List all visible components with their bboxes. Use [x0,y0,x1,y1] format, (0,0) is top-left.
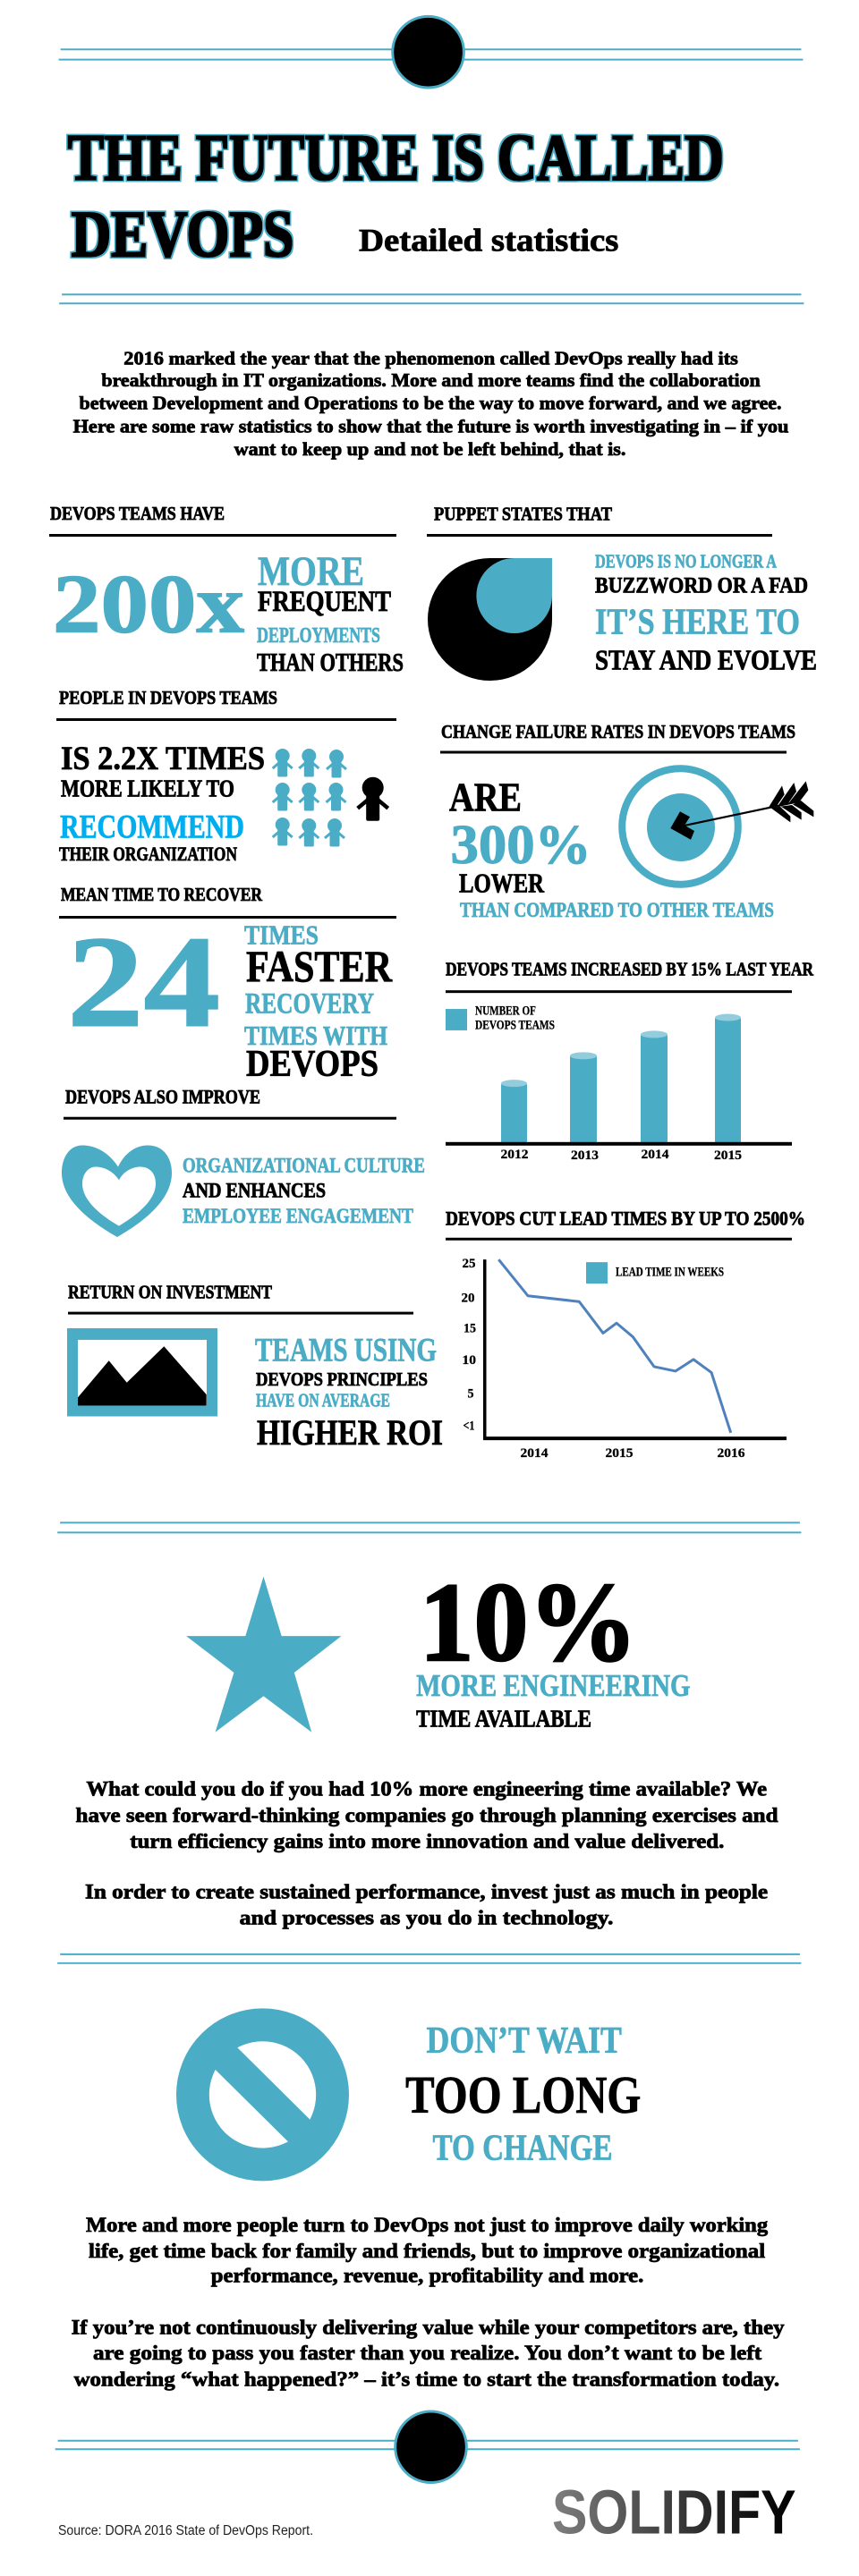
heading: DEVOPS TEAMS HAVE [50,503,225,524]
x axis labels: 2014 [641,1148,669,1162]
y axis labels: 10 [462,1353,476,1368]
stat text: DON’T WAIT [427,2020,622,2062]
intro paragraph [73,347,789,460]
x axis labels: 2016 [717,1446,745,1461]
stat text: THEIR ORGANIZATION [59,843,237,865]
big number: 10% [420,1560,637,1685]
panel: don't wait [72,2020,785,2391]
stat text: RECOVERY [245,987,374,1020]
stat text [255,1331,443,1453]
stat text: THAN COMPARED TO OTHER TEAMS [460,899,774,921]
big number: 200x [53,558,244,651]
stat text: TOO LONG [405,2065,641,2124]
x axis labels [521,1446,745,1461]
x axis labels [501,1148,742,1163]
intro paragraph: want to keep up and not be left behind, that is. [234,438,625,460]
intro paragraph: between Development and Operations to be the way to move forward, and we agree. [80,393,782,414]
icon: droplet [428,558,552,681]
stat text: HIGHER ROI [257,1412,443,1453]
axes [483,1259,787,1440]
legend: NUMBER OF [475,1004,536,1019]
stat text: DEVOPS IS NO LONGER A [595,551,778,572]
icon: prohibited sign [192,2025,333,2165]
x axis labels: 2013 [571,1148,599,1163]
title: THE FUTURE IS CALLED [68,121,724,194]
stat text: ARE [449,775,522,819]
y axis labels: 5 [467,1386,473,1401]
icon: black person [358,777,388,821]
panel: line chart [446,1207,805,1461]
paragraph: In order to create sustained performance, invest just as much in people [85,1881,768,1903]
paragraph: and processes as you do in technology. [240,1907,613,1929]
stat text: THAN OTHERS [257,649,404,677]
panel: change failure [440,721,813,921]
heading: DEVOPS ALSO IMPROVE [65,1085,260,1107]
paragraph: wondering “what happened?” – it’s time to start the transformation today. [74,2368,779,2391]
panel: return on investment [67,1282,443,1453]
stat text: STAY AND EVOLVE [595,644,817,676]
heading: DEVOPS CUT LEAD TIMES BY UP TO 2500% [446,1207,805,1229]
x axis labels: 2015 [714,1148,742,1163]
stat text: MORE [258,548,364,595]
stat text [416,1668,691,1733]
paragraph: are going to pass you faster than you realize. You don’t want to be left [93,2342,762,2364]
heading: RETURN ON INVESTMENT [68,1282,272,1303]
title: DEVOPS [72,198,293,271]
stat text: DEPLOYMENTS [257,624,380,648]
legend [586,1262,724,1284]
legend: LEAD TIME IN WEEKS [616,1266,724,1280]
icon: nine teal people [273,749,346,846]
stat text: FREQUENT [258,586,391,618]
stat text: DEVOPS [246,1043,378,1085]
paragraph: If you’re not continuously delivering value while your competitors are, they [72,2316,785,2338]
stat text: AND ENHANCES [183,1179,326,1201]
stat text: TIME AVAILABLE [416,1706,591,1733]
stat text: BUZZWORD OR A FAD [595,574,808,597]
icon: star [186,1577,341,1733]
logo: Solidify: SOLIDIFY [552,2478,796,2547]
stat text: TO CHANGE [433,2127,612,2167]
paragraph [72,2214,785,2391]
legend: DEVOPS TEAMS [475,1018,555,1032]
intro paragraph: 2016 marked the year that the phenomenon called DevOps really had its [123,347,738,369]
y axis labels: 20 [462,1291,474,1305]
stat text [405,2020,641,2167]
stat text: IT’S HERE TO [595,601,800,642]
x axis labels: 2012 [501,1148,529,1162]
stat text: IS 2.2X TIMES [61,741,265,777]
stat text: TEAMS USING [255,1331,437,1368]
stat text: ORGANIZATIONAL CULTURE [183,1154,425,1176]
heading: CHANGE FAILURE RATES IN DEVOPS TEAMS [441,721,795,742]
top ornament: double line with black circle [59,16,803,88]
icon: target with arrow [622,768,813,885]
panel: mean time to recover [59,884,396,1085]
paragraph [76,1777,778,1929]
stat text: FASTER [246,942,393,991]
heading: MEAN TIME TO RECOVER [61,884,263,905]
stat text: DEVOPS PRINCIPLES [256,1368,428,1390]
title [68,121,724,271]
stat text [449,775,774,921]
paragraph: turn efficiency gains into more innovation and value delivered. [130,1830,724,1852]
y axis labels: <1 [464,1419,474,1434]
x axis labels: 2014 [521,1446,549,1461]
stat text: TIMES [244,919,319,951]
intro paragraph: breakthrough in IT organizations. More and more teams find the collaboration [101,369,761,391]
panel: bar chart [446,959,814,1163]
stat text [257,548,404,677]
stat text [59,741,265,865]
panel: culture [62,1085,425,1237]
panel: puppet [427,503,817,681]
icon: mountain picture [67,1328,217,1417]
stat text: HAVE ON AVERAGE [256,1390,390,1411]
paragraph: have seen forward-thinking companies go through planning exercises and [76,1804,778,1826]
bottom ornament: double line with black circle [55,2411,800,2483]
stat text: MORE LIKELY TO [61,775,234,801]
stat text: LOWER [459,868,544,898]
big number: 24 [67,909,220,1055]
paragraph: life, get time back for family and friends, but to improve organizational [89,2240,765,2262]
y axis labels [462,1257,476,1434]
panel: engineering time [76,1560,778,1929]
icon: heart [62,1146,172,1237]
bars [501,1014,741,1143]
legend [446,1004,555,1032]
stat text: EMPLOYEE ENGAGEMENT [183,1205,413,1227]
stat text: TIMES WITH [244,1020,387,1051]
x axis labels: 2015 [605,1446,634,1461]
stat text: RECOMMEND [60,809,244,846]
line series [498,1259,731,1433]
y axis labels: 15 [464,1322,476,1336]
paragraph: performance, revenue, profitability and more. [211,2265,643,2287]
stat text: 300% [451,815,591,876]
panel: recommend [56,687,396,865]
paragraph: What could you do if you had 10% more engineering time available? We [87,1777,767,1800]
stat text [183,1154,425,1227]
stat text [595,551,817,676]
intro paragraph: Here are some raw statistics to show that the future is worth investigating in – if you [73,415,789,436]
heading: PEOPLE IN DEVOPS TEAMS [59,687,277,708]
source note: Source: DORA 2016 State of DevOps Report. [58,2523,313,2538]
stat text [244,919,393,1085]
panel: deployments [49,503,404,677]
y axis labels: 25 [462,1257,475,1271]
stat text: MORE ENGINEERING [416,1668,691,1703]
subtitle: Detailed statistics [359,223,619,258]
heading: PUPPET STATES THAT [434,503,612,524]
paragraph: More and more people turn to DevOps not just to improve daily working [86,2214,769,2236]
